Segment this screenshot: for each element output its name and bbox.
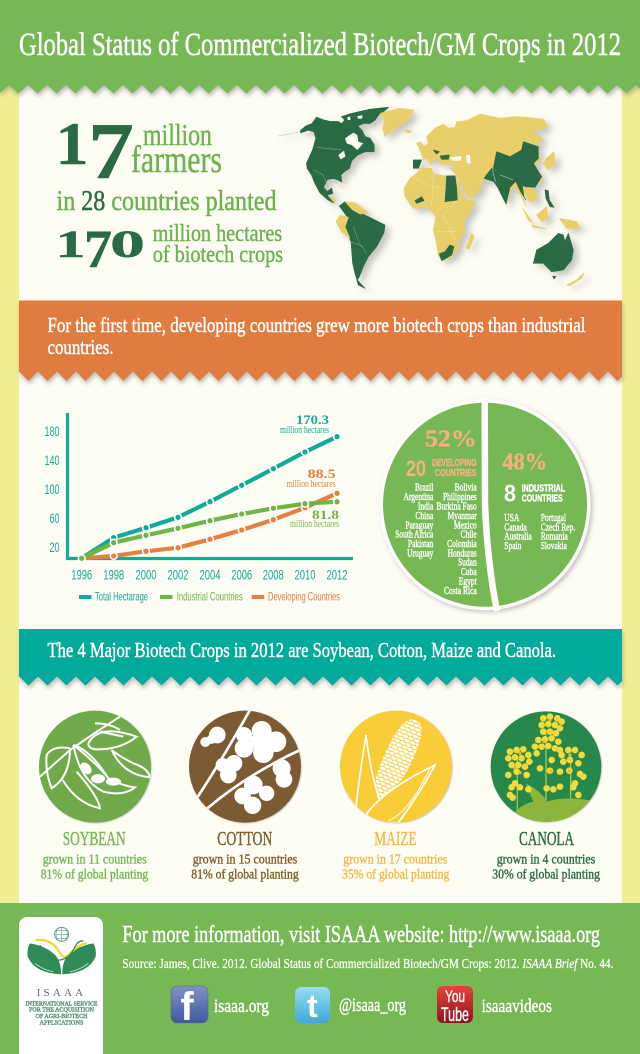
maize label xyxy=(342,828,449,882)
x axis labels: 1998 xyxy=(103,566,124,582)
industrial countries share: COUNTRIES xyxy=(522,493,563,504)
17 million farmers: million xyxy=(143,117,212,152)
developing countries share: COUNTRIES xyxy=(435,468,477,479)
icon: soybean xyxy=(39,711,151,823)
industrial countries share xyxy=(502,449,575,551)
developing countries list, right column: Philippines xyxy=(443,491,477,502)
icon: cotton xyxy=(189,710,301,823)
pie disc xyxy=(380,398,590,611)
developing countries list, left column: China xyxy=(415,510,433,521)
170 million hectares: 7 xyxy=(84,219,112,279)
line chart xyxy=(44,412,353,604)
x axis labels: 2002 xyxy=(168,566,189,582)
social: twitter: @isaaa_org xyxy=(339,995,406,1016)
label 81.8: million hectares xyxy=(290,519,339,530)
label 170.3 xyxy=(280,412,330,436)
developing countries list, right column: Mexico xyxy=(454,519,477,531)
170 million hectares: million hectares xyxy=(153,221,282,247)
developing countries list, left column: Paraguay xyxy=(405,519,434,531)
developing countries list, left column: Pakistan xyxy=(408,538,434,549)
developing countries list, left column xyxy=(395,482,434,559)
maize label: 35% of global planting xyxy=(342,867,449,882)
x axis labels: 2006 xyxy=(231,566,252,582)
x axis labels: 2000 xyxy=(136,566,157,582)
developing countries line xyxy=(82,490,340,559)
industrial countries list, right column: Romania xyxy=(541,531,568,542)
canola label: grown in 4 countries xyxy=(497,852,595,867)
social: twitter: t xyxy=(307,988,318,1024)
developing countries list, right column: Colombia xyxy=(447,538,477,549)
chart legend xyxy=(79,590,340,604)
industrial countries list, left column: USA xyxy=(504,512,520,523)
developing countries list, right column: Honduras xyxy=(448,547,477,559)
developing countries list, right column: Bolivia xyxy=(455,482,477,493)
17 million farmers: 7 xyxy=(88,108,134,196)
label 170.3: million hectares xyxy=(280,425,329,436)
industrial countries list, right column: Slovakia xyxy=(541,540,567,551)
x axis labels xyxy=(71,566,348,582)
industrial countries list, left column xyxy=(504,512,532,551)
17 million farmers xyxy=(56,108,222,196)
developing countries list, right column: Cuba xyxy=(461,566,477,577)
industrial countries list, right column: Czech Rep. xyxy=(541,521,575,533)
developing countries share: 52% xyxy=(425,427,477,453)
developing countries list, left column: Argentina xyxy=(403,491,433,502)
y axis labels: 20 xyxy=(50,539,60,555)
chart legend: Industrial Countries xyxy=(177,590,243,604)
developing countries list, right column: Sudan xyxy=(458,557,477,568)
industrial countries share: 48% xyxy=(502,449,547,475)
developing countries list, right column xyxy=(437,482,477,596)
developing countries list, right column: Costa Rica xyxy=(444,585,477,596)
pie chart xyxy=(380,398,590,611)
developing countries list, right column: Burkina Faso xyxy=(437,501,477,512)
canola label: CANOLA xyxy=(519,828,574,850)
industrial countries list, left column: Canada xyxy=(504,521,527,533)
170 million hectares: 0 xyxy=(110,223,145,266)
industrial countries list, left column: Australia xyxy=(504,531,532,542)
logo wordmark: ISAAA xyxy=(37,987,86,999)
ISAAA logo card xyxy=(19,917,103,1054)
170 million hectares: 1 xyxy=(56,223,86,266)
Americas xyxy=(278,107,414,288)
maize label: MAIZE xyxy=(374,828,417,850)
headline statistics xyxy=(56,108,283,279)
developing countries share: DEVELOPING xyxy=(432,458,477,469)
icon: canola xyxy=(491,711,601,827)
logo tagline xyxy=(26,1000,98,1026)
crop: cotton xyxy=(189,710,301,882)
social: facebook: isaaa.org xyxy=(214,996,269,1017)
y axis labels: 180 xyxy=(44,423,60,439)
x axis labels: 2010 xyxy=(294,566,316,582)
canola label xyxy=(492,828,600,882)
industrial countries list, right column xyxy=(541,512,575,551)
social: facebook: f xyxy=(180,985,194,1029)
label 88.5: 88.5 xyxy=(308,466,336,481)
developing countries share xyxy=(395,427,477,596)
social: facebook xyxy=(171,985,269,1029)
world map xyxy=(278,107,584,288)
title banner xyxy=(0,0,640,94)
crop: maize xyxy=(340,711,452,882)
developing countries list, left column: Brazil xyxy=(415,482,434,493)
x axis labels: 2004 xyxy=(200,566,221,582)
y axis labels: 100 xyxy=(44,481,60,497)
social: twitter xyxy=(295,987,406,1024)
cotton label: 81% of global planting xyxy=(191,867,299,882)
orange banner xyxy=(19,300,622,381)
industrial countries share: 8 xyxy=(504,481,516,508)
label 88.5: million hectares xyxy=(287,479,336,490)
cotton label xyxy=(191,828,299,882)
170 million hectares: of biotech crops xyxy=(153,242,283,268)
logo tagline: INTERNATIONAL SERVICE xyxy=(26,1000,98,1008)
28 countries planted: in 28 countries planted xyxy=(56,185,277,217)
developing countries list, left column: Uruguay xyxy=(407,547,434,559)
teal banner xyxy=(19,629,622,686)
cotton label: COTTON xyxy=(217,828,272,850)
soybean label: SOYBEAN xyxy=(63,828,126,850)
label 88.5 xyxy=(287,466,336,490)
17 million farmers: 1 xyxy=(56,111,88,177)
x axis labels: 2012 xyxy=(326,566,348,582)
industrial countries list, right column: Portugal xyxy=(541,512,567,523)
total hectarage line xyxy=(82,433,340,558)
soybean label xyxy=(41,828,148,882)
chart legend: Total Hectarage xyxy=(95,590,148,604)
canola label: 30% of global planting xyxy=(492,867,600,882)
icon: maize xyxy=(340,711,452,823)
developing countries list, left column: South Africa xyxy=(395,529,433,540)
orange banner text: countries. xyxy=(48,335,114,359)
developing countries list, right column: Egypt xyxy=(459,575,477,587)
footer xyxy=(0,903,640,1054)
source line: Source: James, Clive. 2012. Global Status of Commercialized Biotech/GM Crops: 2012. ISAAA Brief No. 44. xyxy=(122,957,613,972)
developing countries list, right column: Myanmar xyxy=(448,510,477,521)
label 81.8 xyxy=(290,507,340,530)
logo tagline: FOR THE ACQUISITION xyxy=(29,1007,94,1014)
social: youtube: You xyxy=(445,987,465,1006)
crop: canola xyxy=(491,711,601,882)
y axis labels: 140 xyxy=(44,452,60,468)
icon: ISAAA logo xyxy=(27,927,96,974)
industrial countries line xyxy=(78,498,340,562)
industrial countries share: INDUSTRIAL xyxy=(522,483,565,494)
developing countries share: 20 xyxy=(406,456,426,481)
soybean label: 81% of global planting xyxy=(41,867,148,882)
y axis labels xyxy=(44,423,60,555)
logo tagline: APPLICATIONS xyxy=(40,1020,84,1026)
soybean label: grown in 11 countries xyxy=(43,852,147,867)
social: youtube xyxy=(437,986,552,1026)
y axis labels: 60 xyxy=(50,510,60,526)
label 170.3: 170.3 xyxy=(296,412,330,427)
developing countries list, right column: Chile xyxy=(460,529,477,540)
cotton label: grown in 15 countries xyxy=(193,852,297,867)
x axis labels: 1996 xyxy=(71,566,92,582)
17 million farmers: farmers xyxy=(131,139,222,181)
crop: soybean xyxy=(39,711,151,882)
developing countries list, left column: India xyxy=(418,501,433,512)
industrial countries list, left column: Spain xyxy=(504,540,522,551)
Eurasia, Africa and Oceania xyxy=(404,114,584,286)
label 81.8: 81.8 xyxy=(312,507,340,522)
chart legend: Developing Countries xyxy=(268,590,340,604)
maize label: grown in 17 countries xyxy=(343,852,447,867)
x axis labels: 2008 xyxy=(263,566,284,582)
social: youtube: Tube xyxy=(441,1005,469,1026)
170 million hectares xyxy=(56,219,283,279)
axes xyxy=(68,413,353,558)
logo tagline: OF AGRI-BIOTECH xyxy=(36,1013,88,1020)
social: youtube: isaaavideos xyxy=(482,996,552,1017)
